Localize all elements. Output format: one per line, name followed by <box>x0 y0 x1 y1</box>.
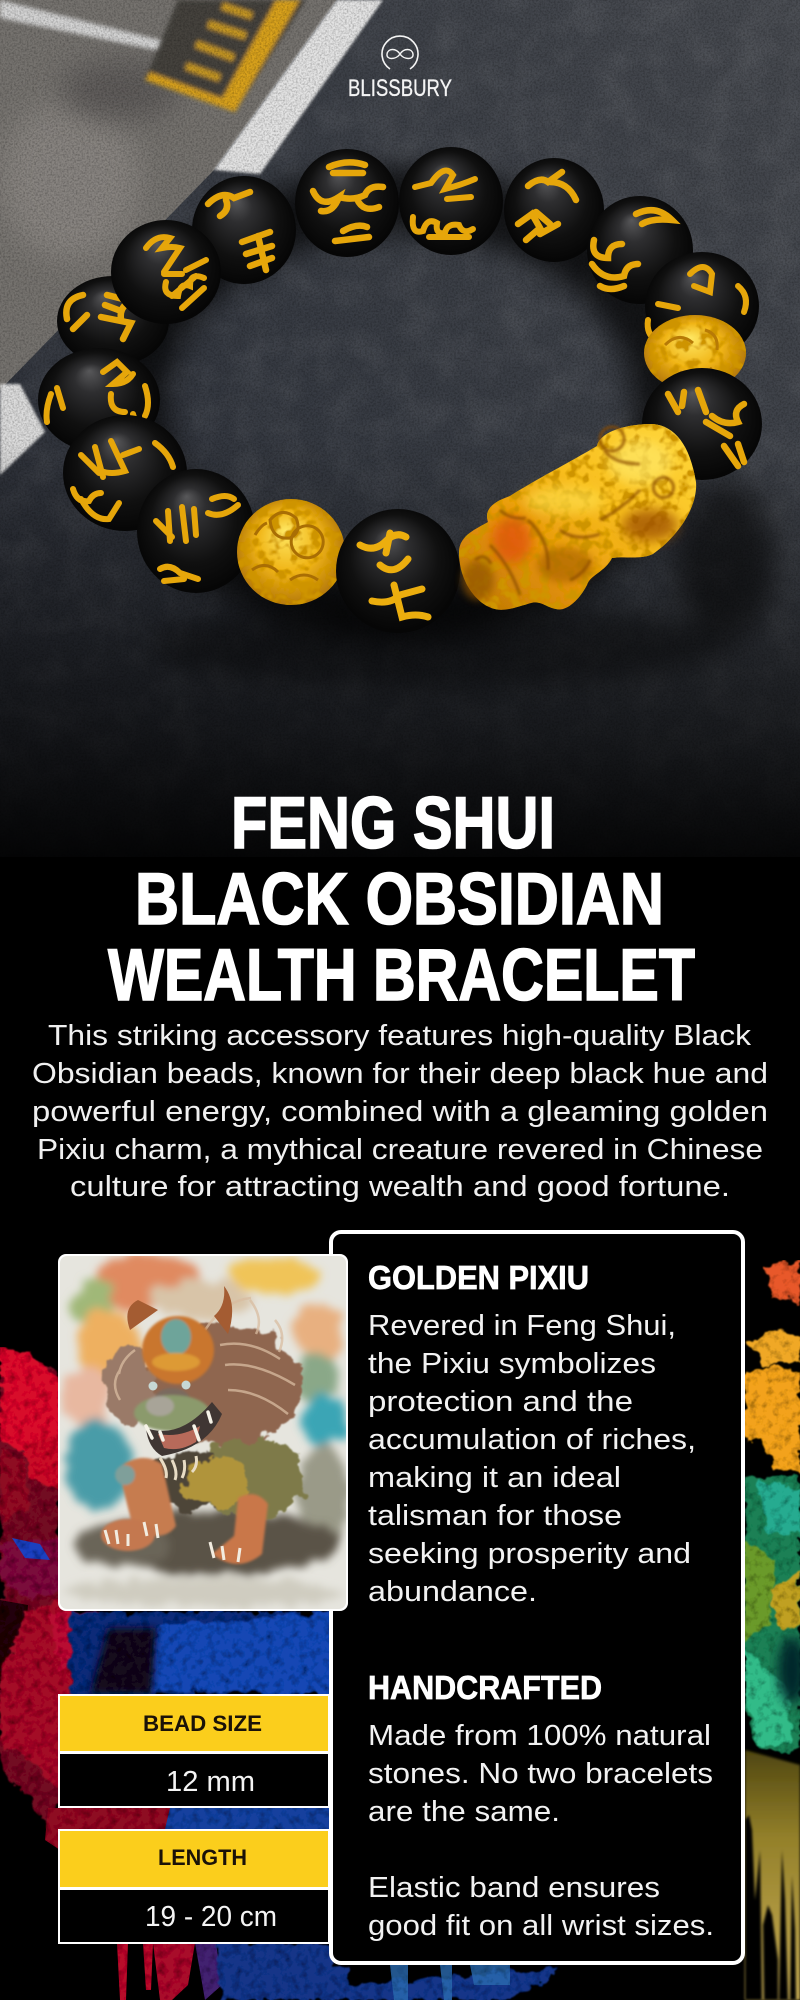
gold bead <box>644 315 746 391</box>
value: 19 - 20 cm: 19 - 20 cm <box>145 1901 277 1933</box>
text: handcrafted description: stones. No two bracelets <box>368 1758 713 1790</box>
text: golden pixiu description: talisman for those <box>368 1500 622 1532</box>
intro paragraph: This striking accessory features high-quality Black <box>48 1020 752 1052</box>
creature body and mane <box>104 1323 306 1518</box>
ground wash <box>65 1511 345 1606</box>
text: handcrafted description: are the same. <box>368 1796 560 1828</box>
intro paragraph <box>32 1020 768 1203</box>
heading: handcrafted: HANDCRAFTED <box>368 1669 602 1706</box>
text: golden pixiu description <box>368 1310 696 1608</box>
text: golden pixiu description: abundance. <box>368 1576 537 1608</box>
intro paragraph: Pixiu charm, a mythical creature revered in Chinese <box>37 1134 763 1166</box>
spec table: bead size <box>59 1695 329 1807</box>
title: BLACK OBSIDIAN <box>135 859 664 940</box>
watercolor pixiu illustration card <box>58 1254 349 1611</box>
bead <box>137 469 255 593</box>
hero photo: bracelet on dark stone <box>0 0 800 857</box>
text: golden pixiu description: seeking prosperity and <box>368 1538 691 1570</box>
golden pixiu charm <box>459 424 696 610</box>
gold bead <box>237 499 345 605</box>
intro paragraph: Obsidian beads, known for their deep black hue and <box>32 1058 768 1090</box>
bead <box>192 176 296 284</box>
bead <box>111 220 221 324</box>
intro paragraph: powerful energy, combined with a gleaming golden <box>32 1096 768 1128</box>
value: 12 mm: 12 mm <box>166 1766 255 1798</box>
info panel <box>331 1232 743 1963</box>
bead <box>642 368 762 480</box>
brand name: BLISSBURY <box>348 75 452 102</box>
bead <box>57 276 169 366</box>
text: handcrafted description <box>368 1720 714 1942</box>
bracelet <box>38 147 762 633</box>
text: handcrafted description: Elastic band ensures <box>368 1872 660 1904</box>
spec table: length <box>59 1830 329 1943</box>
label: bead size: BEAD SIZE <box>143 1711 262 1736</box>
text: golden pixiu description: Revered in Feng Shui, <box>368 1310 676 1342</box>
left paint splash: red and blue powder <box>0 1347 560 2000</box>
bead <box>295 149 399 257</box>
title <box>108 783 695 1016</box>
bead <box>399 147 503 255</box>
text: golden pixiu description: making it an ideal <box>368 1462 621 1494</box>
text: golden pixiu description: protection and the <box>368 1386 633 1418</box>
bead <box>336 509 460 633</box>
right paint splash: orange, green, yellow drips <box>745 1260 800 2000</box>
title: FENG SHUI <box>231 783 555 864</box>
bead <box>38 348 160 452</box>
intro paragraph: culture for attracting wealth and good fortune. <box>70 1171 730 1203</box>
text: golden pixiu description: the Pixiu symbolizes <box>368 1348 656 1380</box>
text: handcrafted description: good fit on all wrist sizes. <box>368 1910 714 1942</box>
bead <box>504 158 604 262</box>
label: length: LENGTH <box>158 1845 247 1870</box>
heading: golden pixiu: GOLDEN PIXIU <box>368 1259 589 1296</box>
text: handcrafted description: Made from 100% natural <box>368 1720 711 1752</box>
logo <box>348 36 452 102</box>
bead <box>587 196 693 304</box>
bead <box>63 415 187 531</box>
logo mark: infinity in circle <box>382 36 418 69</box>
text: golden pixiu description: accumulation of riches, <box>368 1424 696 1456</box>
bead <box>645 252 759 360</box>
